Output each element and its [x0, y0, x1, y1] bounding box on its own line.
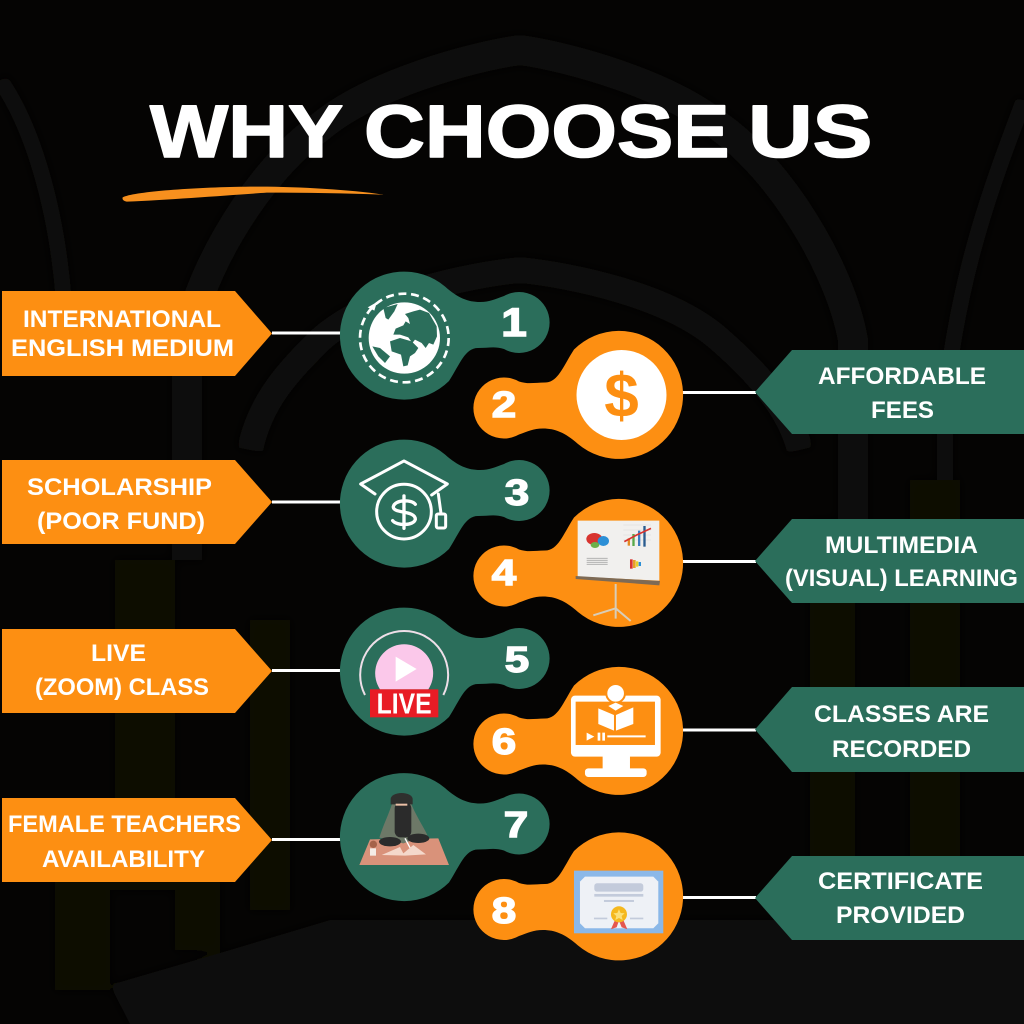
icon: globe [360, 294, 449, 382]
item 2: affordable fees [473, 331, 1024, 459]
banner 1: ENGLISH MEDIUM [11, 335, 234, 362]
title: US [748, 91, 872, 173]
icon: certificate [574, 871, 663, 933]
item 8: certificate provided [473, 832, 1024, 960]
icon: veiled teacher at desk [359, 793, 449, 865]
banner 7 [2, 798, 272, 882]
banner 6 [755, 687, 1024, 772]
number 7: 7 [504, 805, 528, 845]
blob 2 [473, 331, 683, 459]
icon: live play button [360, 631, 448, 720]
item 5: live zoom class [2, 608, 550, 736]
number 6: 6 [492, 722, 516, 762]
title: WHY [150, 90, 343, 173]
item 3: scholarship [2, 440, 550, 568]
item 7: female teachers [2, 773, 550, 901]
number 2: 2 [492, 385, 516, 425]
banner 5: (ZOOM) CLASS [35, 674, 209, 701]
banner 7: AVAILABILITY [42, 846, 205, 873]
banner 7: FEMALE TEACHERS [8, 811, 241, 838]
banner 8: CERTIFICATE [818, 868, 983, 895]
blob 1 [340, 272, 550, 400]
title [150, 90, 872, 173]
banner 3: (POOR FUND) [37, 508, 205, 535]
banner 3: SCHOLARSHIP [27, 474, 212, 501]
number 5: 5 [505, 640, 529, 680]
icon: presentation board [576, 521, 660, 621]
banner 5 [2, 629, 272, 713]
item 4: multimedia learning [473, 499, 1024, 627]
number 4: 4 [492, 553, 517, 593]
banner 2: AFFORDABLE [818, 363, 986, 390]
icon: live play button: LIVE [377, 688, 432, 720]
banner 8: PROVIDED [836, 902, 965, 929]
banner 3 [2, 460, 272, 544]
number 3: 3 [505, 473, 529, 513]
banner 1 [2, 291, 272, 376]
item 6: classes are recorded [473, 667, 1024, 795]
banner 1: INTERNATIONAL [23, 306, 221, 333]
number 8: 8 [492, 891, 516, 931]
icon: dollar coin [576, 350, 666, 440]
icon: dollar coin: $ [604, 362, 639, 431]
blob 7 [340, 773, 550, 901]
icon: video lesson monitor [571, 684, 661, 777]
brush underline [122, 187, 383, 202]
banner 4: MULTIMEDIA [825, 532, 978, 559]
banner 8 [755, 856, 1024, 940]
banner 4: (VISUAL) LEARNING [785, 565, 1018, 592]
blob 3 [340, 440, 550, 568]
blob 8 [473, 832, 683, 960]
title: CHOOSE [364, 90, 730, 173]
number 1: 1 [501, 301, 527, 345]
banner 5: LIVE [91, 640, 146, 667]
banner 6: RECORDED [832, 736, 971, 763]
blob 4 [473, 499, 683, 627]
banner 2 [755, 350, 1024, 434]
banner 2: FEES [871, 397, 934, 424]
item 1: international english medium [2, 272, 550, 400]
banner 6: CLASSES ARE [814, 701, 989, 728]
blob 5 [340, 608, 550, 736]
blob 6 [473, 667, 683, 795]
icon: graduation cap with dollar [361, 461, 447, 539]
banner 4 [755, 519, 1024, 603]
